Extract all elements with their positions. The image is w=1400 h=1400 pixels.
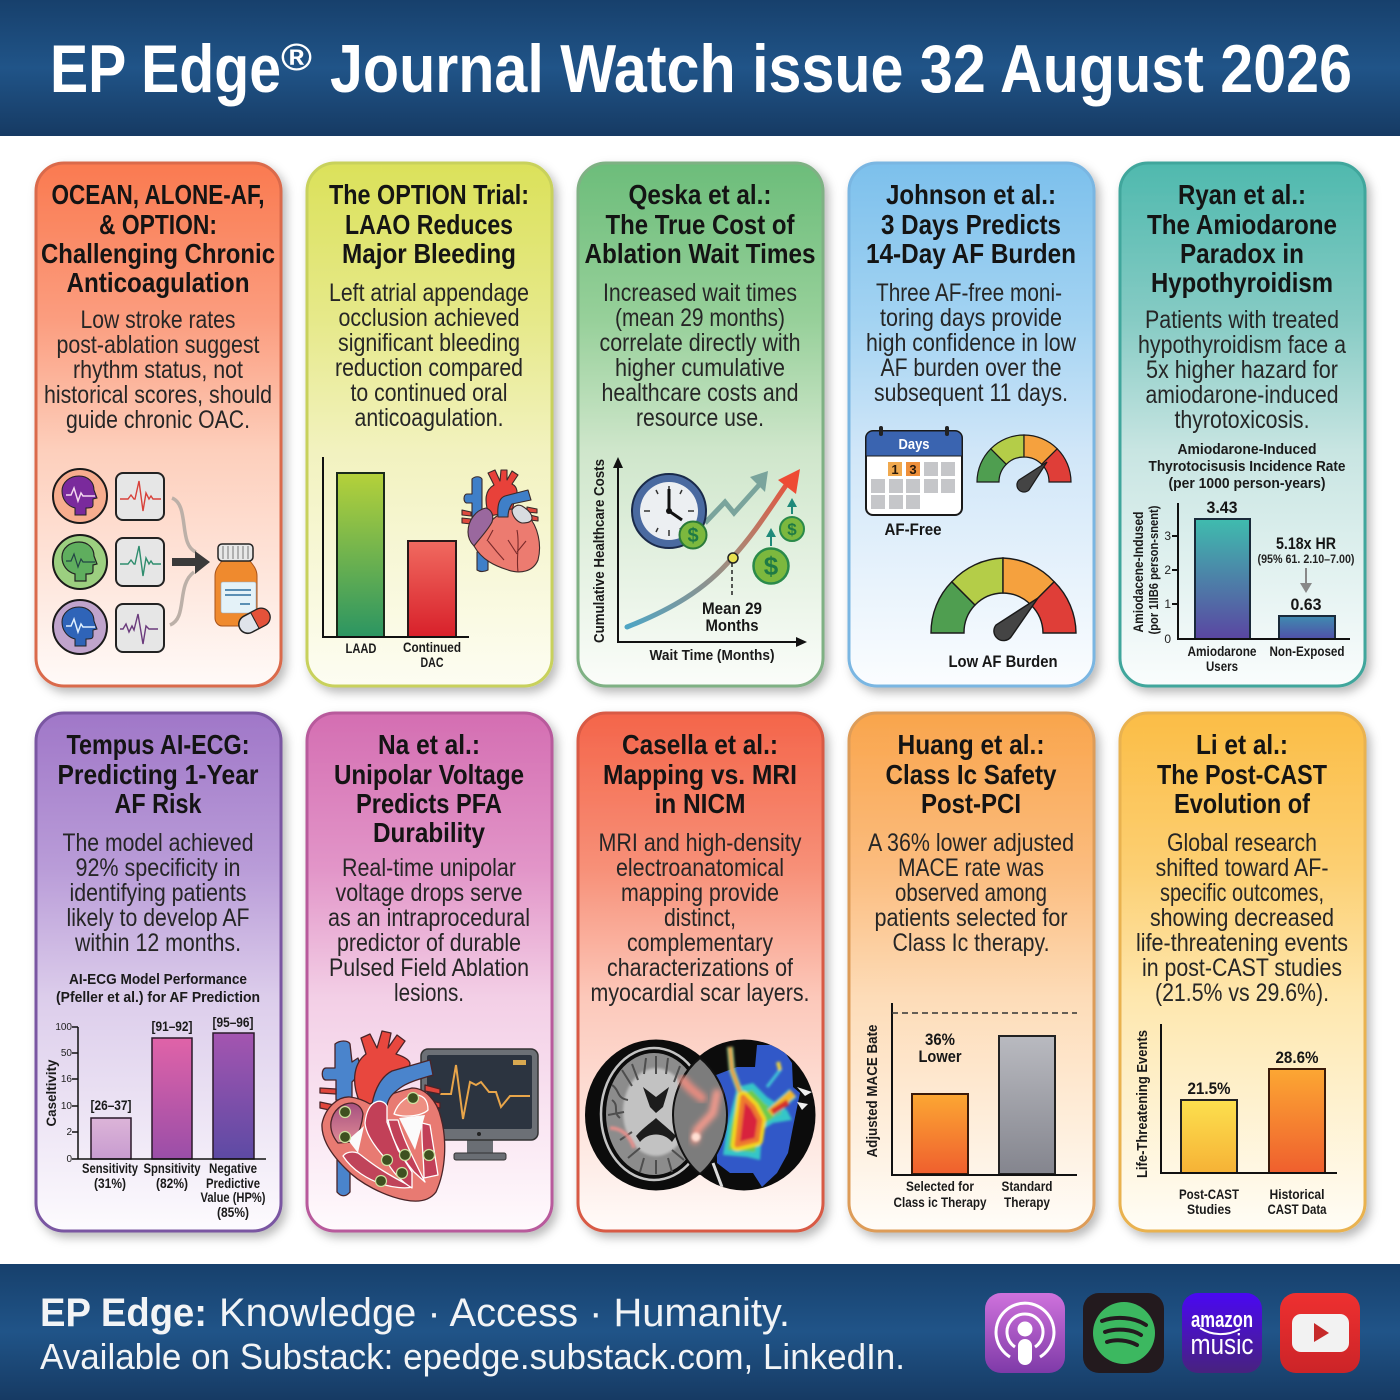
heading: The OPTION Trial:: [329, 179, 529, 210]
bar chart: bleeding: LAAD: [346, 640, 376, 656]
heading: Hypothyroidism: [1151, 267, 1333, 298]
icon: small gauge: [977, 435, 1071, 492]
bar chart: incidence rate: 3: [1164, 529, 1171, 543]
body text: characterizations of: [607, 954, 793, 982]
icon: large gauge: [931, 558, 1076, 641]
bar chart: MACE: Standard: [1002, 1178, 1052, 1194]
footer text: EP Edge:: [40, 1291, 207, 1335]
body text: occlusion achieved: [338, 304, 520, 332]
body text: [868, 829, 1074, 957]
body text: observed among: [895, 879, 1047, 907]
line chart: cost vs wait: [591, 457, 807, 664]
heading: The True Cost of: [606, 209, 795, 240]
line chart: cost vs wait: Mean 29: [702, 599, 762, 618]
body text: high confidence in low: [866, 329, 1077, 357]
body text: higher cumulative: [615, 354, 785, 382]
heading: [334, 729, 524, 848]
body text: The model achieved: [62, 829, 254, 857]
bar chart: AI-ECG performance: Caseltivity: [43, 1059, 59, 1126]
bar chart: incidence rate: (95% 61. 2.10–7.00): [1258, 552, 1354, 566]
body text: [1136, 829, 1348, 1007]
heading: Predicting 1-Year: [58, 759, 259, 790]
heading: Huang et al.:: [898, 729, 1044, 760]
bar chart: AI-ECG performance: Sensitivity: [82, 1160, 138, 1176]
body text: within 12 months.: [74, 929, 241, 957]
icon: rhythm heads to medication: [53, 469, 273, 654]
body text: voltage drops serve: [336, 879, 522, 907]
heading: Johnson et al.:: [886, 179, 1056, 210]
panel: OCEAN, ALONE-AF, OPTION: [36, 163, 281, 686]
body text: guide chronic OAC.: [66, 406, 250, 434]
body text: showing decreased: [1150, 904, 1334, 932]
body text: resource use.: [636, 404, 764, 432]
heading: [1147, 179, 1337, 298]
body text: correlate directly with: [600, 329, 800, 357]
bar chart: AI-ECG performance: 16: [61, 1074, 72, 1085]
heading: LAAO Reduces: [345, 209, 513, 240]
electroanatomical map: [672, 1038, 818, 1193]
bar chart: incidence rate: Amiodarone-Induced: [1178, 441, 1316, 458]
icon: amazon music: amazon: [1191, 1307, 1253, 1332]
line chart: cost vs wait: Wait Time (Months): [650, 647, 774, 664]
body text: amiodarone-induced: [1146, 381, 1338, 409]
bar chart: life-threatening events: Life-Threatening Events: [1134, 1030, 1151, 1178]
panel: Johnson et al.: [849, 163, 1094, 686]
bar chart: MACE: Selected for: [906, 1178, 974, 1194]
body text: [600, 279, 800, 432]
bar chart: AI-ECG performance: Negative: [209, 1160, 257, 1176]
heading: Anticoagulation: [66, 267, 250, 298]
MRI scan: [585, 1040, 700, 1190]
bar chart: AI-ECG performance: AI-ECG Model Performance: [69, 971, 247, 988]
heading: [584, 179, 816, 269]
heading: [58, 729, 259, 819]
body text: anticoagulation.: [354, 404, 504, 432]
body text: mapping provide: [621, 879, 779, 907]
body text: Three AF-free moni-: [876, 279, 1062, 307]
body text: shifted toward AF-: [1156, 854, 1328, 882]
body text: life-threatening events: [1136, 929, 1348, 957]
bar chart: incidence rate: Users: [1206, 658, 1238, 674]
bar chart: AI-ECG performance: [95–96]: [212, 1014, 254, 1030]
panel: Tempus AI-ECG: [36, 713, 281, 1231]
icon: podcasts: [985, 1293, 1065, 1373]
body text: [866, 279, 1077, 407]
bar chart: life-threatening events: 28.6%: [1276, 1048, 1318, 1067]
image: MRI and electroanatomical map overlap: [584, 1038, 818, 1193]
bar chart: bleeding: Continued: [403, 639, 461, 655]
footer text: Knowledge · Access · Humanity.: [219, 1291, 790, 1335]
heading: AF Risk: [114, 788, 202, 819]
footer text: [40, 1291, 905, 1377]
bar chart: MACE: Lower: [918, 1047, 962, 1066]
heading: Challenging Chronic: [41, 238, 275, 269]
body text: Pulsed Field Ablation: [329, 954, 529, 982]
body text: predictor of durable: [337, 929, 521, 957]
heading: 14-Day AF Burden: [866, 238, 1076, 269]
body text: AF burden over the: [880, 354, 1062, 382]
icon: heart cross-section: [320, 1031, 445, 1201]
body text: specific outcomes,: [1160, 879, 1324, 907]
bar chart: incidence rate: Thyrotocisusis Incidence Rate: [1148, 458, 1346, 475]
heading: [41, 179, 275, 298]
body text: 5x higher hazard for: [1146, 356, 1338, 384]
heading: Qeska et al.:: [628, 179, 772, 210]
panel: Na et al.: [307, 713, 552, 1231]
body text: thyrotoxicosis.: [1174, 406, 1310, 434]
icon: calendar: 1: [891, 462, 899, 477]
body text: Real-time unipolar: [342, 854, 516, 882]
body text: significant bleeding: [338, 329, 520, 357]
heading: [603, 729, 797, 819]
heading: OCEAN, ALONE-AF,: [52, 179, 264, 210]
bar chart: AI-ECG performance: 0: [66, 1154, 72, 1165]
icon: calendar: 3: [909, 462, 917, 477]
heading: Evolution of: [1174, 788, 1311, 819]
icon: amazon music: [1182, 1293, 1262, 1373]
bar chart: AI-ECG performance: 50: [61, 1048, 72, 1059]
heading: Predicts PFA: [356, 788, 502, 819]
panel: Qeska et al.: [578, 163, 823, 686]
body text: identifying patients: [70, 879, 246, 907]
body text: [328, 854, 530, 1007]
bar chart: MACE: Adjusted MACE Bate: [864, 1024, 881, 1158]
body text: distinct,: [664, 904, 736, 932]
body text: [62, 829, 254, 957]
bar chart: MACE: [864, 1003, 1077, 1210]
heading: Li et al.:: [1196, 729, 1288, 760]
panel: Huang et al.: [849, 713, 1094, 1231]
panel: Ryan et al.: [1120, 163, 1365, 686]
bar chart: AI-ECG performance: Spnsitivity: [144, 1160, 201, 1176]
icon: coins: $: [787, 520, 797, 539]
body text: complementary: [627, 929, 773, 957]
icon: calendar: Days: [898, 436, 930, 453]
bar chart: incidence rate: Amiodarone: [1188, 643, 1257, 659]
bar chart: incidence rate: 2: [1164, 563, 1171, 577]
bar chart: AI-ECG performance: Predictive: [206, 1175, 260, 1191]
bar chart: AI-ECG performance: [91–92]: [152, 1018, 192, 1034]
body text: healthcare costs and: [602, 379, 798, 407]
icon: coins: $: [687, 525, 699, 547]
heading: Casella et al.:: [622, 729, 778, 760]
body text: electroanatomical: [616, 854, 784, 882]
title: EP Edge: [50, 31, 281, 107]
panel: The OPTION Trial: [307, 163, 552, 686]
body text: [1138, 306, 1346, 434]
lens overlap: [673, 1058, 727, 1174]
icon: amazon music: music: [1190, 1329, 1254, 1361]
bar chart: life-threatening events: 21.5%: [1188, 1079, 1230, 1098]
bar chart: AI-ECG performance: (31%): [94, 1175, 126, 1191]
bar chart: MACE: Therapy: [1004, 1194, 1050, 1210]
bar chart: AI-ECG performance: 10: [61, 1101, 72, 1112]
body text: 92% specificity in: [76, 854, 240, 882]
gauge label: Low AF Burden: [948, 652, 1058, 671]
heading: Class Ic Safety: [886, 759, 1057, 790]
bar chart: AI-ECG performance: (82%): [156, 1175, 188, 1191]
body text: MACE rate was: [898, 854, 1044, 882]
body text: (21.5% vs 29.6%).: [1155, 979, 1329, 1007]
heading: The Amiodarone: [1147, 209, 1337, 240]
body text: historical scores, should: [44, 381, 272, 409]
heading: Unipolar Voltage: [334, 759, 524, 790]
header banner: [0, 0, 1400, 136]
heading: [1157, 729, 1327, 819]
bar chart: bleeding: [323, 457, 469, 670]
line chart: cost vs wait: Months: [706, 616, 758, 635]
body text: to continued oral: [350, 379, 508, 407]
body text: subsequent 11 days.: [874, 379, 1068, 407]
bar chart: incidence rate: 3.43: [1206, 498, 1238, 517]
body text: Left atrial appendage: [329, 279, 529, 307]
body text: Global research: [1167, 829, 1317, 857]
body text: Increased wait times: [603, 279, 797, 307]
heading: Paradox in: [1180, 238, 1304, 269]
bar chart: life-threatening events: Post-CAST: [1179, 1186, 1239, 1202]
body text: myocardial scar layers.: [590, 979, 810, 1007]
heading: [329, 179, 529, 269]
body text: toring days provide: [880, 304, 1062, 332]
icon: calendar: AF-Free: [884, 520, 942, 539]
heading: The Post-CAST: [1157, 759, 1327, 790]
bar chart: incidence rate: 1: [1164, 597, 1171, 611]
bar chart: incidence rate: [1130, 441, 1354, 674]
heading: [886, 729, 1057, 819]
heading: & OPTION:: [99, 209, 217, 240]
heading: 3 Days Predicts: [881, 209, 1061, 240]
heading: Major Bleeding: [342, 238, 516, 269]
body text: Patients with treated: [1145, 306, 1339, 334]
body text: lesions.: [394, 979, 464, 1007]
heading: Ablation Wait Times: [584, 238, 816, 269]
body text: as an intraprocedural: [328, 904, 530, 932]
heading: [866, 179, 1076, 269]
body text: likely to develop AF: [66, 904, 250, 932]
panel: Casella et al.: [578, 713, 823, 1231]
bar chart: AI-ECG performance: 2: [66, 1127, 72, 1138]
body text: patients selected for: [874, 904, 1068, 932]
heading: Durability: [373, 817, 485, 848]
body text: [44, 306, 272, 434]
bar chart: incidence rate: Amiodacene-Indused: [1130, 512, 1146, 632]
title: ®: [281, 37, 312, 79]
icon: monitor with ECG: [421, 1049, 538, 1160]
bar chart: life-threatening events: Studies: [1187, 1201, 1231, 1217]
body text: (mean 29 months): [615, 304, 785, 332]
icon: coins: $: [764, 551, 779, 581]
bar chart: AI-ECG performance: 100: [55, 1022, 72, 1033]
footer text: Available on Substack: epedge.substack.com, LinkedIn.: [40, 1336, 905, 1377]
bar chart: life-threatening events: CAST Data: [1268, 1201, 1327, 1217]
bar chart: incidence rate: 5.18x HR: [1276, 534, 1336, 553]
bar chart: life-threatening events: Historical: [1270, 1186, 1324, 1202]
bar chart: AI-ECG performance: [26–37]: [90, 1097, 132, 1113]
heading: Post-PCI: [921, 788, 1021, 819]
bar chart: incidence rate: 0: [1164, 632, 1171, 646]
heading: Na et al.:: [378, 729, 480, 760]
bar chart: incidence rate: (per 1000 person-years): [1168, 475, 1326, 492]
body text: reduction compared: [335, 354, 523, 382]
bar chart: MACE: Class ic Therapy: [894, 1194, 987, 1210]
bar chart: life-threatening events: [1134, 1024, 1337, 1217]
body text: Low stroke rates: [80, 306, 236, 334]
body text: Class Ic therapy.: [892, 929, 1050, 957]
body text: hypothyroidism face a: [1138, 331, 1346, 359]
bar chart: AI-ECG performance: [43, 971, 266, 1220]
body text: [590, 829, 810, 1007]
panel: Li et al.: [1120, 713, 1365, 1231]
body text: rhythm status, not: [73, 356, 243, 384]
heading: in NICM: [654, 788, 746, 819]
body text: A 36% lower adjusted: [868, 829, 1074, 857]
bar chart: AI-ECG performance: (Pfeller et al.) for AF Prediction: [56, 989, 260, 1006]
heading: Ryan et al.:: [1178, 179, 1306, 210]
icon: clock: [632, 474, 706, 548]
heading: Mapping vs. MRI: [603, 759, 797, 790]
icon: spotify: [1083, 1293, 1164, 1373]
body text: MRI and high-density: [598, 829, 802, 857]
body text: post-ablation suggest: [56, 331, 260, 359]
bar chart: incidence rate: (por 1IIB6 person-snent): [1146, 506, 1161, 634]
heading: Tempus AI-ECG:: [66, 729, 250, 760]
icon: coins: [680, 498, 804, 584]
icon: heart: [462, 470, 540, 572]
bar chart: AI-ECG performance: Value (HP%): [200, 1189, 266, 1205]
icon: youtube: [1280, 1293, 1360, 1373]
bar chart: MACE: 36%: [925, 1030, 955, 1049]
bar chart: AI-ECG performance: (85%): [217, 1204, 249, 1220]
body text: in post-CAST studies: [1142, 954, 1342, 982]
bar chart: incidence rate: 0.63: [1290, 595, 1322, 614]
footer banner: [0, 1264, 1400, 1400]
body text: [329, 279, 529, 432]
bar chart: bleeding: DAC: [420, 654, 444, 670]
icon: calendar: [866, 426, 962, 539]
line chart: cost vs wait: Cumulative Healthcare Costs: [591, 459, 608, 643]
bar chart: incidence rate: Non-Exposed: [1270, 643, 1344, 659]
